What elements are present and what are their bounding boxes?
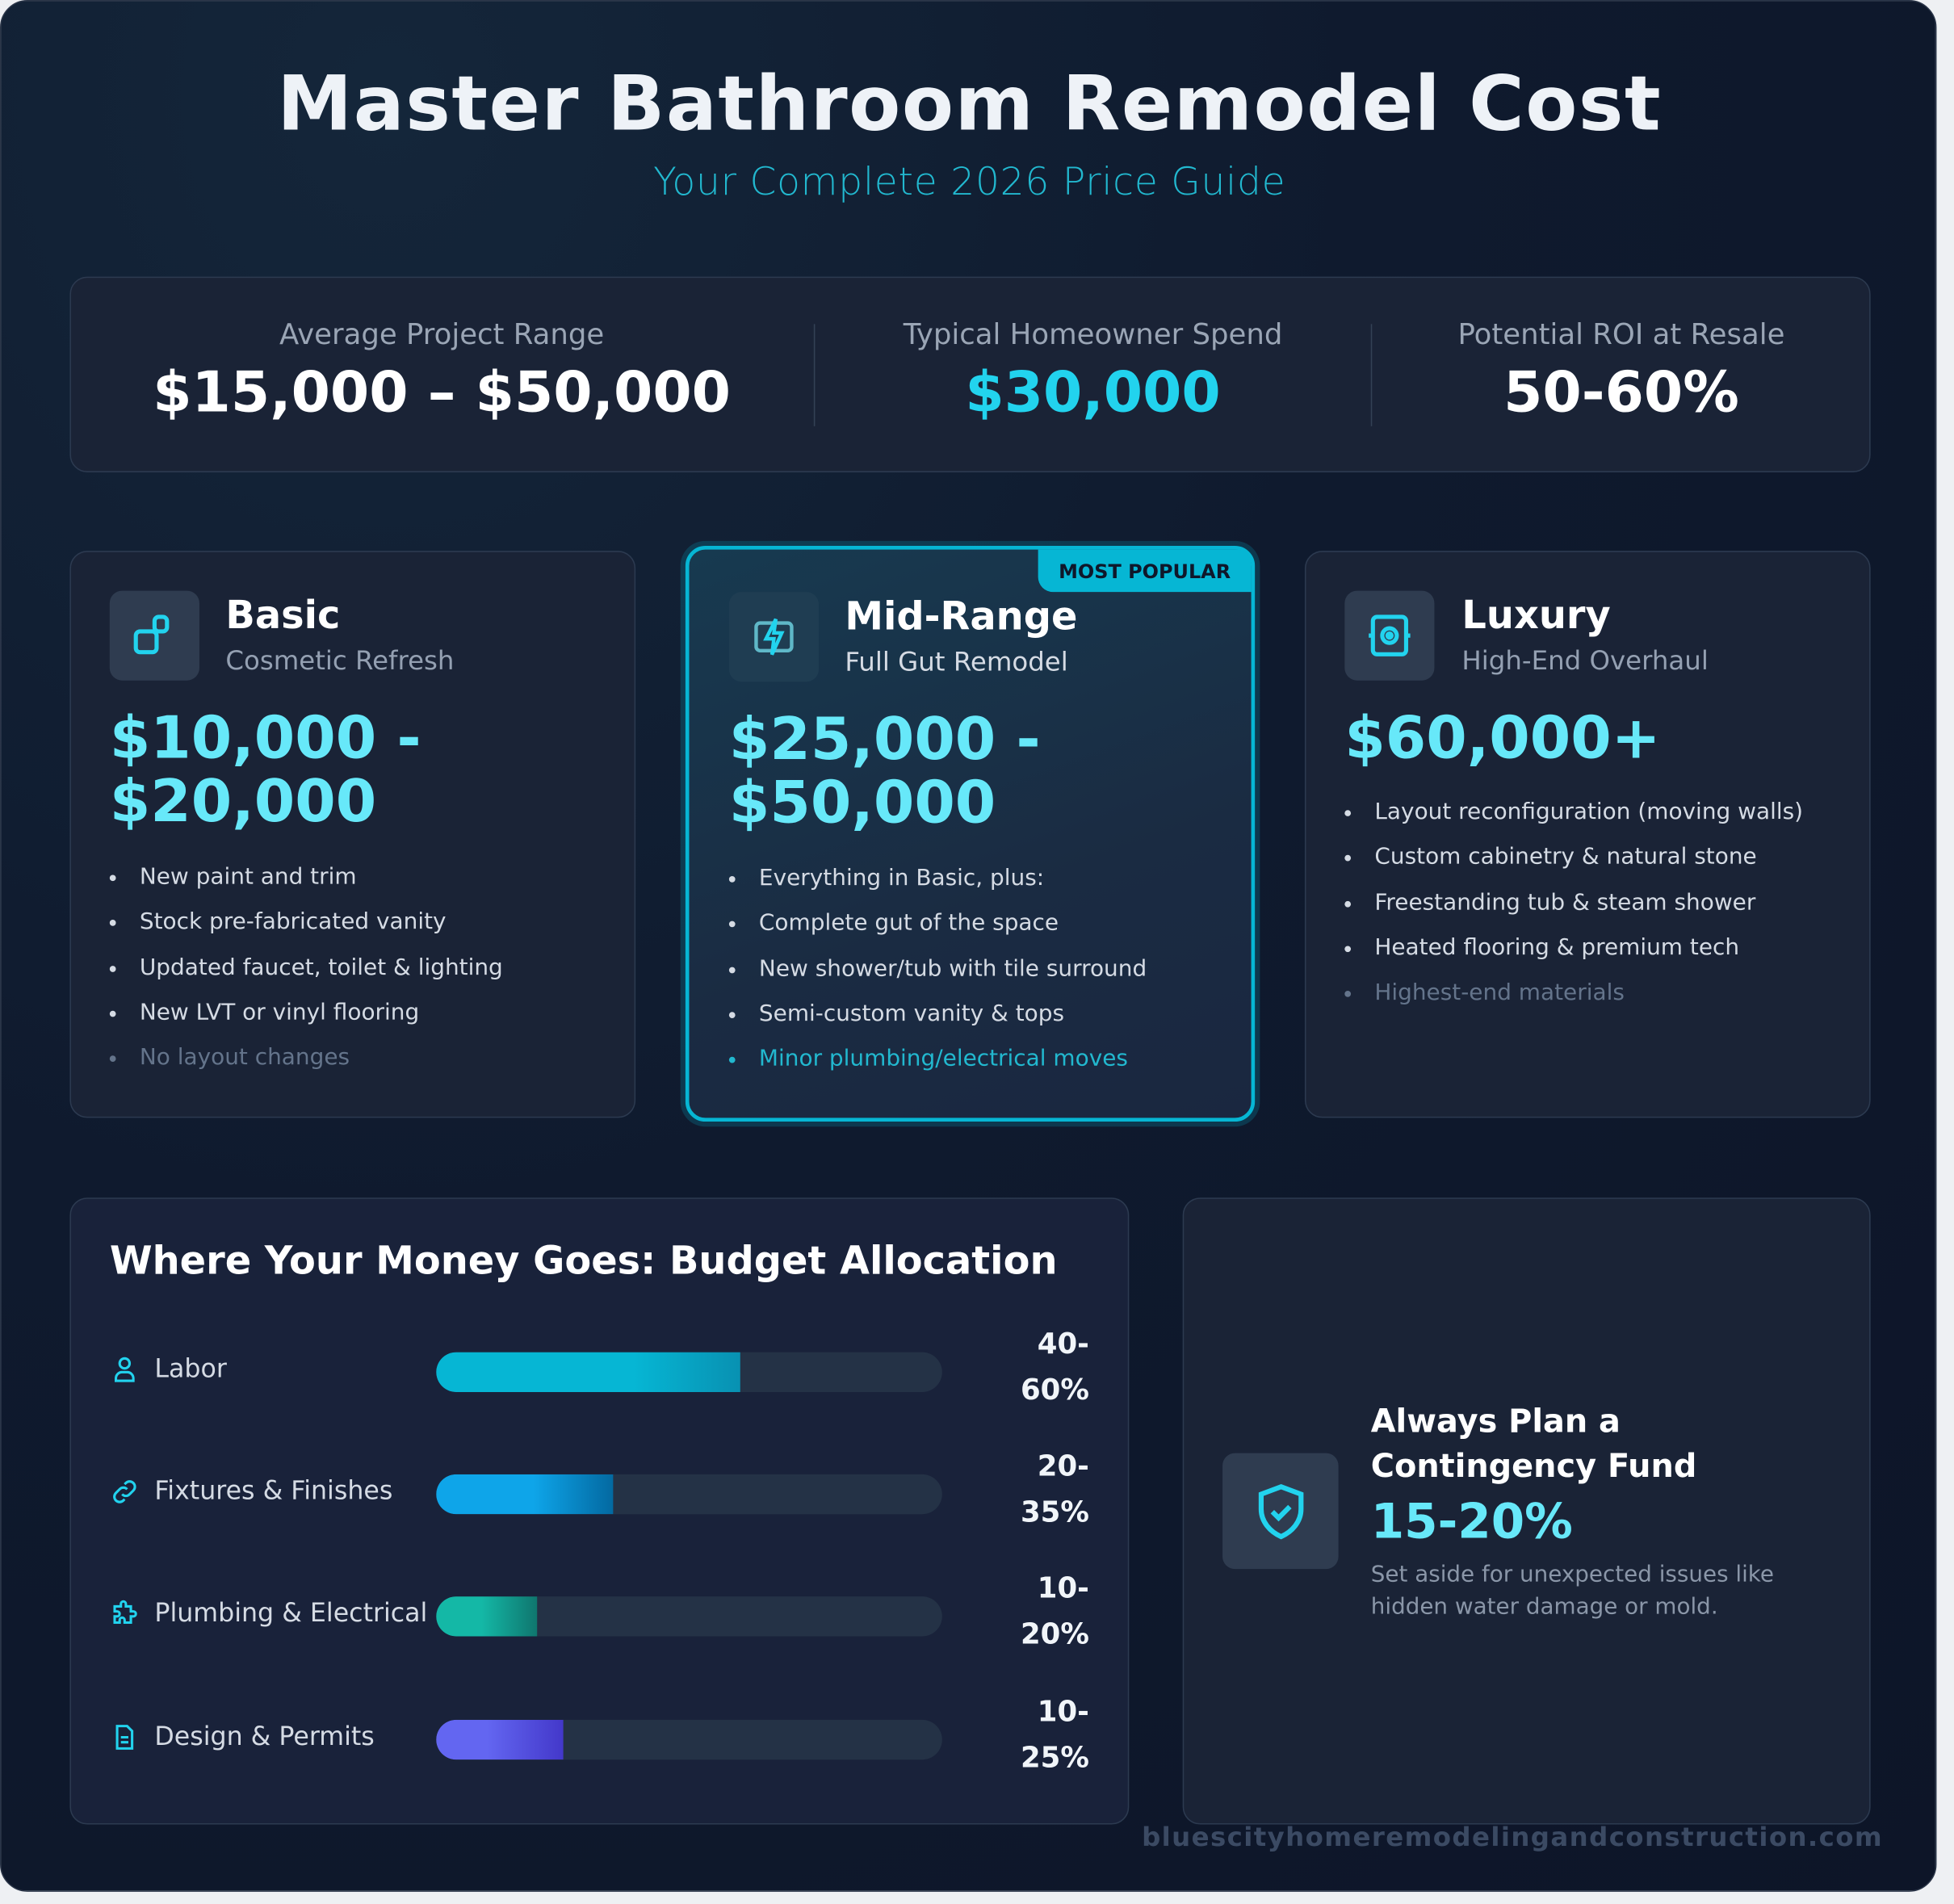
row: plumbing (113, 1573, 1089, 1651)
row: fixtures: 35% (1021, 1497, 1089, 1529)
value: 15-20% (1371, 1495, 1573, 1550)
stat: typical spend: $30,000 (965, 359, 1221, 425)
row: fixtures: Fixtures & Finishes (154, 1475, 392, 1505)
panel: budget allocation (69, 1197, 1129, 1825)
text (1371, 1562, 1774, 1620)
bullets (1344, 799, 1803, 1006)
bullets: Layout reconfiguration (moving walls) (1374, 799, 1803, 825)
bullets (728, 865, 1147, 1072)
card: mid-range: Full Gut Remodel (845, 647, 1068, 677)
bullets: Stock pre-fabricated vanity (140, 909, 447, 935)
row: fixtures: 20- (1038, 1451, 1089, 1483)
icon: shield (1222, 1453, 1339, 1569)
stat: ROI: 50-60% (1503, 359, 1739, 425)
bullets: Semi-custom vanity & tops (759, 1000, 1064, 1027)
bullets: Complete gut of the space (759, 910, 1059, 937)
row: design: 10- (1038, 1696, 1089, 1729)
price: $25,000 - (729, 706, 1041, 774)
heading (1371, 1403, 1696, 1486)
stat: average range: $15,000 – $50,000 (153, 359, 731, 425)
stat: typical spend: Typical Homeowner Spend (904, 319, 1282, 351)
card: basic: Cosmetic Refresh (225, 645, 454, 676)
row: labor (115, 1328, 1089, 1407)
icon: link (113, 1480, 136, 1503)
stat: ROI: Potential ROI at Resale (1457, 319, 1784, 351)
row: design (116, 1696, 1089, 1775)
stat: ROI (1457, 319, 1784, 425)
badge: MOST POPULAR (1059, 561, 1231, 583)
subtitle: Your Complete 2026 Price Guide (653, 161, 1285, 204)
price (729, 706, 1041, 837)
card: basic (69, 551, 635, 1118)
icon: bolt (729, 592, 819, 681)
bullets: Custom cabinetry & natural stone (1374, 844, 1757, 870)
footer url: bluescityhomeremodelingandconstruction.com (1142, 1822, 1883, 1852)
row: labor: 60% (1021, 1374, 1089, 1407)
panel: contingency (1183, 1197, 1871, 1825)
bullets: New LVT or vinyl flooring (140, 1000, 419, 1025)
title: Master Bathroom Remodel Cost (277, 61, 1662, 149)
bullets (110, 864, 503, 1071)
row: plumbing: 20% (1021, 1619, 1089, 1651)
icon: layers (110, 591, 199, 681)
row: plumbing: 10- (1038, 1573, 1089, 1605)
card: luxury: High-End Overhaul (1461, 645, 1709, 676)
icon: puzzle (113, 1600, 137, 1624)
icon: person (115, 1357, 135, 1382)
stat: typical spend (903, 319, 1282, 425)
row: fixtures (113, 1451, 1089, 1529)
price: $10,000 - (110, 704, 421, 773)
bullets: Freestanding tub & steam shower (1374, 889, 1755, 916)
bullets: New shower/tub with tile surround (759, 955, 1147, 982)
heading: Contingency Fund (1371, 1448, 1696, 1486)
row: plumbing: Plumbing & Electrical (154, 1598, 427, 1628)
heading: Basic (225, 593, 340, 638)
card: luxury (1305, 551, 1871, 1118)
bullets: New paint and trim (140, 864, 357, 890)
heading: Where Your Money Goes: Budget Allocation (110, 1239, 1058, 1284)
text: Set aside for unexpected issues like (1371, 1562, 1774, 1587)
panel: stats (69, 277, 1871, 472)
row: design: 25% (1021, 1743, 1089, 1775)
price: $20,000 (110, 768, 376, 837)
price (110, 704, 421, 837)
row: design: Design & Permits (154, 1721, 375, 1751)
heading: Luxury (1461, 593, 1611, 638)
bullets: Everything in Basic, plus: (759, 865, 1044, 891)
row: labor: Labor (154, 1353, 227, 1383)
icon: document (116, 1725, 134, 1750)
heading: Mid-Range (845, 594, 1077, 640)
text: hidden water damage or mold. (1371, 1594, 1718, 1620)
price: $60,000+ (1344, 704, 1661, 773)
bullets: Heated flooring & premium tech (1374, 934, 1739, 961)
icon: safe (1344, 591, 1434, 681)
bullets: Minor plumbing/electrical moves (759, 1046, 1128, 1072)
bullets: Updated faucet, toilet & lighting (140, 954, 503, 980)
stat: average range: Average Project Range (279, 319, 604, 351)
heading: Always Plan a (1371, 1403, 1621, 1441)
bullets: No layout changes (140, 1045, 350, 1071)
stat: average range (153, 319, 731, 425)
row: labor: 40- (1038, 1328, 1089, 1361)
badge (1038, 550, 1252, 592)
price: $50,000 (729, 769, 996, 837)
card: mid-range (686, 546, 1255, 1122)
bullets: Highest-end materials (1374, 979, 1625, 1006)
